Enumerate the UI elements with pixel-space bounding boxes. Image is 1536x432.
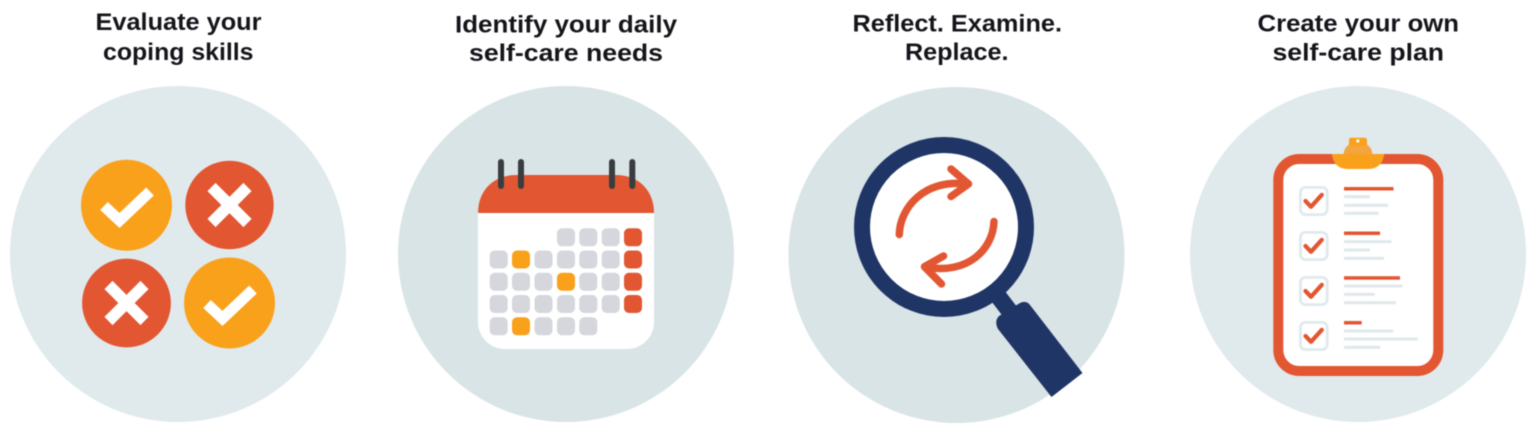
panel: reflect examine replace	[788, 11, 1124, 423]
calendar page	[478, 213, 654, 349]
heading: reflect examine replace	[852, 11, 1062, 66]
clipboard clip	[1332, 138, 1384, 169]
magnifier lens	[862, 145, 1026, 309]
heading: reflect examine replace: Reflect. Examine.	[852, 11, 1062, 38]
heading: create your own self-care plan: Create your own	[1258, 11, 1459, 38]
background circle	[788, 87, 1124, 423]
calendar day grid	[490, 228, 642, 335]
icon: orange check top left	[81, 160, 172, 251]
clipboard board	[1278, 159, 1438, 371]
heading: evaluate your coping skills	[96, 9, 262, 66]
heading: evaluate your coping skills: Evaluate your	[96, 9, 262, 36]
magnifier handle	[996, 302, 1082, 397]
checklist row 4	[1300, 321, 1418, 350]
heading: identify your daily self-care needs: self-care needs	[469, 40, 663, 67]
background circle	[1190, 86, 1526, 422]
background circle	[10, 86, 346, 422]
calendar rings	[498, 159, 635, 189]
heading: create your own self-care plan: self-care plan	[1272, 39, 1444, 66]
panel: evaluate coping skills	[10, 9, 346, 422]
heading: evaluate your coping skills: coping skills	[103, 39, 254, 66]
heading: reflect examine replace: Replace.	[905, 39, 1008, 66]
heading: identify your daily self-care needs: Identify your daily	[455, 11, 678, 38]
icon: cycle arrows	[899, 169, 994, 284]
icon: magnifying glass	[862, 145, 1082, 397]
icon: red cross top right	[185, 161, 274, 249]
icon: orange check bottom right	[184, 258, 275, 348]
magnifier neck	[998, 296, 1011, 313]
heading: identify your daily self-care needs	[455, 11, 678, 67]
icon: clipboard	[1278, 138, 1438, 371]
calendar header	[478, 175, 654, 213]
panel: identify daily self-care needs	[398, 11, 734, 422]
heading: create your own self-care plan	[1258, 11, 1459, 66]
background circle	[398, 86, 734, 422]
icon: red cross bottom left	[82, 259, 171, 347]
checklist row 2	[1300, 232, 1392, 260]
panel: create self-care plan	[1190, 11, 1526, 422]
checklist row 3	[1300, 276, 1402, 305]
checklist row 1	[1300, 187, 1394, 215]
icon: calendar	[478, 159, 654, 349]
